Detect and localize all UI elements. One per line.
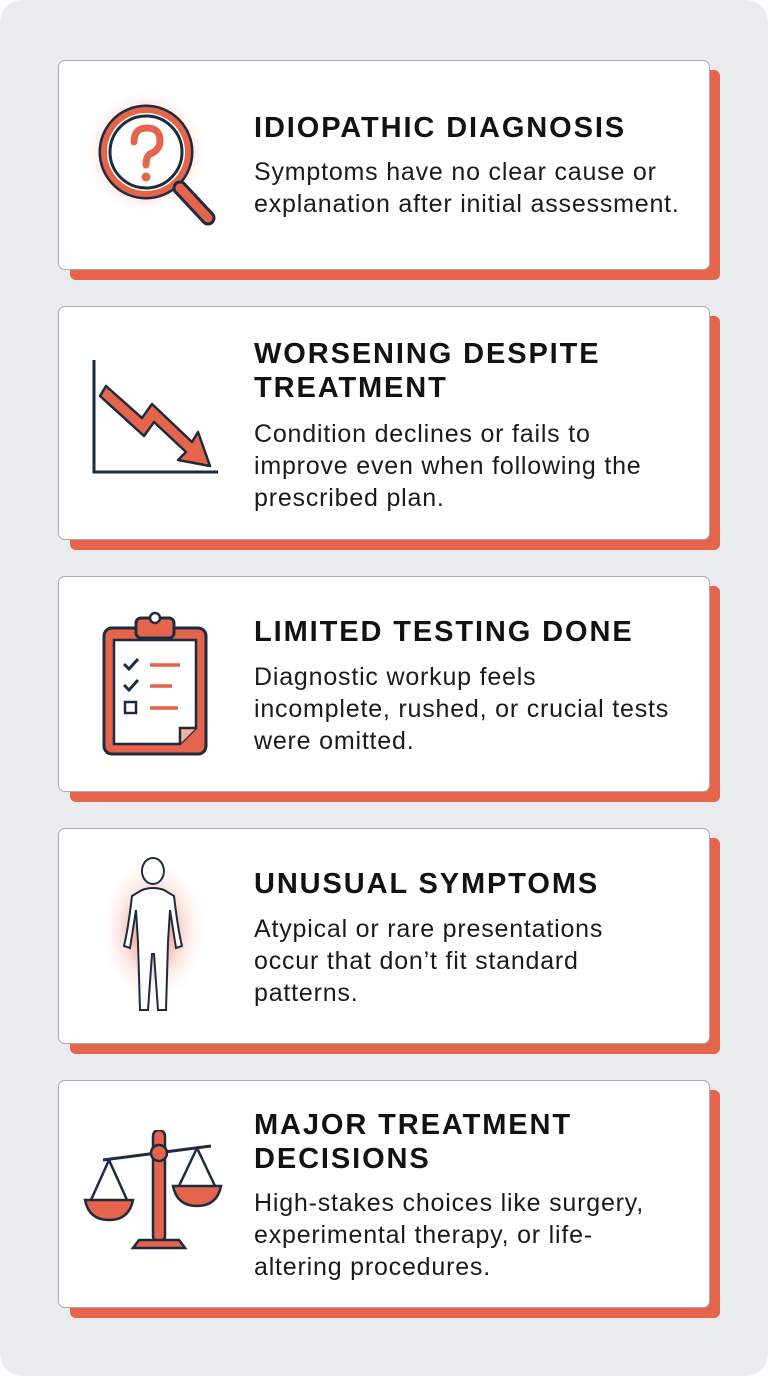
body text xyxy=(254,915,603,1007)
title: LIMITED TESTING DONE xyxy=(254,616,634,648)
title: TREATMENT xyxy=(254,372,448,404)
body text: Symptoms have no clear cause or xyxy=(254,158,657,186)
title xyxy=(254,1109,572,1175)
body text: altering procedures. xyxy=(254,1253,491,1281)
icon: human figure xyxy=(109,857,196,1011)
body text: prescribed plan. xyxy=(254,484,445,512)
icon: magnifier question xyxy=(92,98,216,226)
body text: Diagnostic workup feels xyxy=(254,663,536,691)
body text: patterns. xyxy=(254,979,358,1007)
title: DECISIONS xyxy=(254,1143,431,1175)
card: unusual symptoms xyxy=(58,828,720,1054)
body text: Condition declines or fails to xyxy=(254,420,591,448)
card: major treatment decisions xyxy=(58,1080,720,1318)
body text xyxy=(254,158,680,218)
body text xyxy=(254,663,669,755)
card: idiopathic diagnosis xyxy=(58,60,720,280)
body text: experimental therapy, or life- xyxy=(254,1221,593,1249)
body text: improve even when following the xyxy=(254,452,642,480)
title: WORSENING DESPITE xyxy=(254,338,600,370)
icon: clipboard xyxy=(102,612,208,756)
body text: were omitted. xyxy=(254,727,414,755)
body text: occur that don’t fit standard xyxy=(254,947,579,975)
icon: declining chart xyxy=(92,360,218,474)
card: limited testing done xyxy=(58,576,720,802)
icon: scales xyxy=(84,1130,222,1250)
title: MAJOR TREATMENT xyxy=(254,1109,572,1141)
card: worsening despite treatment xyxy=(58,306,720,550)
body text xyxy=(254,1189,644,1281)
title: UNUSUAL SYMPTOMS xyxy=(254,868,599,900)
body text: explanation after initial assessment. xyxy=(254,190,680,218)
title xyxy=(254,338,600,404)
body text: High-stakes choices like surgery, xyxy=(254,1189,644,1217)
title: IDIOPATHIC DIAGNOSIS xyxy=(254,112,626,144)
body text xyxy=(254,420,642,512)
body text: Atypical or rare presentations xyxy=(254,915,603,943)
body text: incomplete, rushed, or crucial tests xyxy=(254,695,669,723)
